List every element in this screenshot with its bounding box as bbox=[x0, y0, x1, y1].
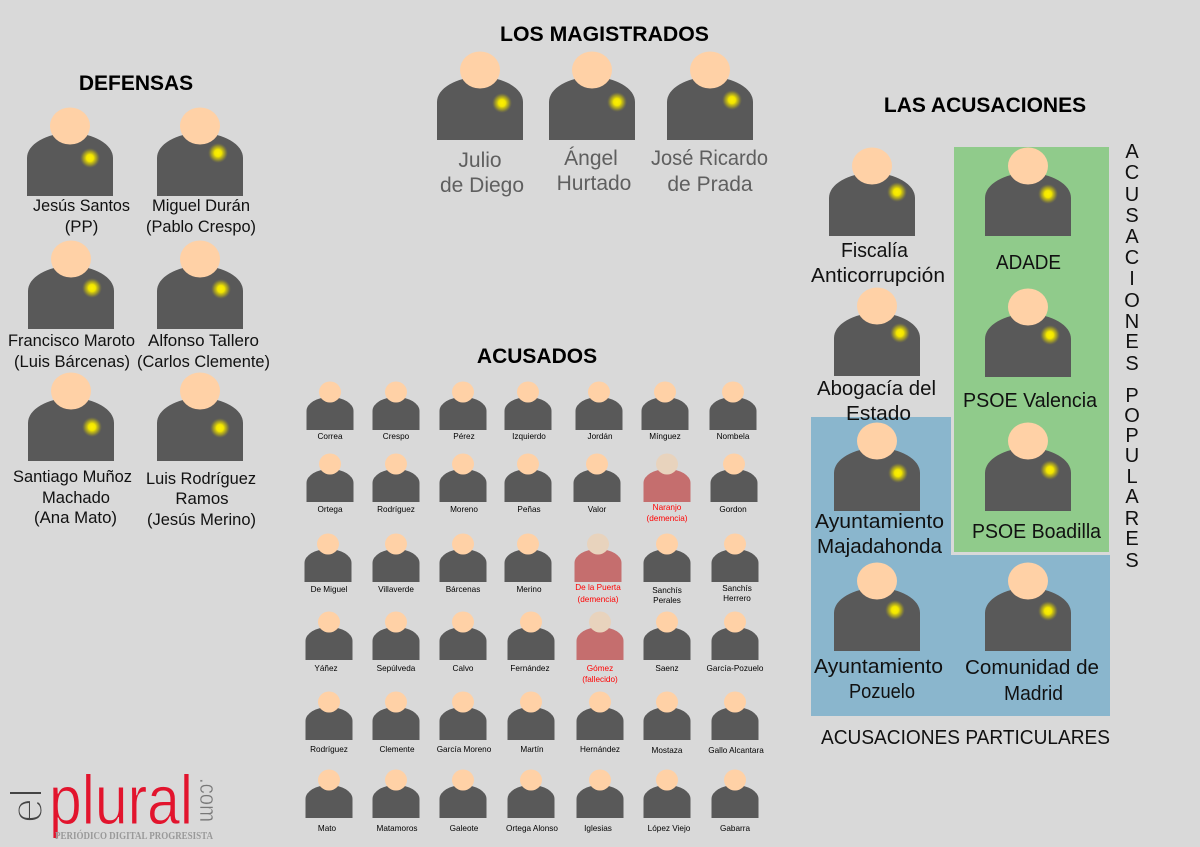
accused row 1: Crespo bbox=[383, 432, 410, 441]
accused row 4: Yáñez bbox=[314, 664, 338, 673]
prosecution: Comunidad de Madrid: Comunidad de bbox=[965, 657, 1099, 679]
defender: Francisco Maroto: Francisco Maroto bbox=[8, 331, 135, 350]
accused row 4: García-Pozuelo bbox=[707, 664, 764, 673]
prosecution: ADADE bbox=[985, 148, 1071, 274]
accused row 5: Mostaza bbox=[652, 746, 683, 755]
accused row 5: Hernández bbox=[580, 745, 620, 754]
prosecution: ADADE: ADADE bbox=[996, 252, 1061, 274]
label: acusaciones populares (vertical): A bbox=[1125, 486, 1139, 508]
defender: Jesús Santos: (PP) bbox=[65, 217, 98, 236]
accused row 6: Ortega Alonso bbox=[506, 824, 558, 833]
accused row 3: Herrero bbox=[723, 594, 751, 603]
accused row 2 bbox=[306, 454, 758, 523]
accused row 3: Merino bbox=[516, 585, 542, 594]
magistrate: José Ricardo de Prada: de Prada bbox=[667, 173, 753, 196]
label: acusaciones populares (vertical): P bbox=[1125, 385, 1139, 407]
defender: Luis Rodríguez Ramos: Luis Rodríguez bbox=[146, 469, 256, 488]
defender: Santiago Muñoz Machado: Santiago Muñoz bbox=[13, 467, 132, 486]
prosecution: Comunidad de Madrid: Madrid bbox=[1004, 683, 1063, 705]
title: defensas: DEFENSAS bbox=[79, 72, 193, 95]
magistrate: José Ricardo de Prada bbox=[651, 52, 768, 196]
label: acusaciones populares (vertical): E bbox=[1125, 528, 1139, 550]
prosecution: Abogacía del Estado: Abogacía del bbox=[817, 378, 936, 400]
accused row 2: Naranjo bbox=[653, 503, 682, 512]
accused row 1 bbox=[306, 382, 756, 441]
label: acusaciones populares (vertical): R bbox=[1125, 508, 1139, 530]
label: acusaciones populares (vertical): C bbox=[1125, 247, 1139, 269]
defender: Jesús Santos bbox=[27, 108, 130, 236]
accused row 5: Martín bbox=[520, 745, 544, 754]
defender: Alfonso Tallero: (Carlos Clemente) bbox=[137, 352, 270, 371]
prosecution: Ayuntamiento Pozuelo bbox=[814, 562, 943, 703]
title: acusados: ACUSADOS bbox=[477, 345, 597, 368]
label: acusaciones populares (vertical): O bbox=[1124, 405, 1140, 427]
accused row 2: Valor bbox=[588, 505, 607, 514]
accused row 3: Bárcenas bbox=[446, 585, 480, 594]
accused row 1: Jordán bbox=[587, 432, 613, 441]
accused row 4: Fernández bbox=[510, 664, 550, 673]
accused row 2: Rodríguez bbox=[377, 505, 415, 514]
accused row 3: Villaverde bbox=[378, 585, 414, 594]
prosecution: PSOE Boadilla bbox=[972, 422, 1102, 543]
prosecution: PSOE Valencia: PSOE Valencia bbox=[963, 390, 1098, 412]
defender: Luis Rodríguez Ramos: Ramos bbox=[175, 489, 229, 508]
prosecution: Ayuntamiento Majadahonda: Majadahonda bbox=[817, 536, 943, 558]
magistrate: Julio de Diego bbox=[437, 52, 524, 197]
magistrate: Ángel Hurtado bbox=[549, 52, 635, 195]
accused row 6: López Viejo bbox=[648, 824, 691, 833]
accused row 5: García Moreno bbox=[437, 745, 492, 754]
accused row 4: Saenz bbox=[655, 664, 679, 673]
accused row 1: Mínguez bbox=[649, 432, 681, 441]
accused row 2: (demencia) bbox=[647, 514, 688, 523]
label: acusaciones populares (vertical): S bbox=[1125, 353, 1139, 375]
label: acusaciones populares (vertical): A bbox=[1125, 226, 1139, 248]
prosecution: PSOE Boadilla: PSOE Boadilla bbox=[972, 521, 1102, 543]
label: acusaciones particulares: ACUSACIONES PARTICULARES bbox=[821, 727, 1110, 749]
prosecution: Ayuntamiento Majadahonda: Ayuntamiento bbox=[815, 511, 944, 533]
accused row 3 bbox=[304, 534, 758, 605]
magistrate: Julio de Diego: Julio bbox=[458, 149, 502, 172]
defender: Luis Rodríguez Ramos: (Jesús Merino) bbox=[147, 510, 256, 529]
defender: Jesús Santos: Jesús Santos bbox=[33, 196, 130, 215]
accused row 2: Moreno bbox=[450, 505, 478, 514]
accused row 5 bbox=[306, 692, 764, 755]
defender: Alfonso Tallero: Alfonso Tallero bbox=[148, 331, 259, 350]
accused row 3: De la Puerta bbox=[575, 583, 621, 592]
title: las acusaciones: LAS ACUSACIONES bbox=[884, 94, 1086, 117]
prosecution: Fiscalía Anticorrupción bbox=[811, 148, 945, 287]
accused row 2: Gordon bbox=[719, 505, 747, 514]
defender: Miguel Durán: (Pablo Crespo) bbox=[146, 217, 256, 236]
label: acusaciones populares (vertical): A bbox=[1125, 141, 1139, 163]
logo: elplural.com: .com bbox=[194, 778, 221, 822]
accused row 3: Sanchís bbox=[722, 584, 752, 593]
label: acusaciones populares (vertical): U bbox=[1125, 445, 1139, 467]
accused row 4: Gómez bbox=[587, 664, 613, 673]
defender: Francisco Maroto: (Luis Bárcenas) bbox=[14, 352, 130, 371]
label: acusaciones populares (vertical): P bbox=[1125, 425, 1139, 447]
label: acusaciones populares (vertical): S bbox=[1125, 205, 1139, 227]
accused row 6: Matamoros bbox=[377, 824, 417, 833]
accused row 4: Calvo bbox=[453, 664, 474, 673]
label: acusaciones populares (vertical): S bbox=[1125, 550, 1139, 572]
accused row 3: (demencia) bbox=[578, 595, 619, 604]
label: acusaciones populares (vertical): O bbox=[1124, 290, 1140, 312]
label: acusaciones populares (vertical): U bbox=[1125, 184, 1139, 206]
logo: elplural.com: plural bbox=[49, 761, 193, 839]
label: acusaciones populares (vertical): L bbox=[1126, 466, 1138, 488]
defender: Santiago Muñoz Machado: Machado bbox=[42, 488, 110, 507]
magistrate: José Ricardo de Prada: José Ricardo bbox=[651, 147, 768, 170]
title: los magistrados: LOS MAGISTRADOS bbox=[500, 23, 709, 46]
prosecution: Fiscalía Anticorrupción: Anticorrupción bbox=[811, 265, 945, 287]
prosecution: Ayuntamiento Pozuelo: Ayuntamiento bbox=[814, 656, 943, 678]
prosecution: Abogacía del Estado bbox=[817, 288, 936, 425]
accused row 2: Ortega bbox=[317, 505, 343, 514]
accused row 6: Mato bbox=[318, 824, 337, 833]
accused row 6 bbox=[306, 770, 758, 833]
accused row 4: (fallecido) bbox=[582, 675, 618, 684]
defender: Alfonso Tallero bbox=[137, 240, 270, 371]
accused row 5: Rodríguez bbox=[310, 745, 348, 754]
panel: acusaciones populares bbox=[954, 147, 1109, 552]
defender: Miguel Durán: Miguel Durán bbox=[152, 196, 250, 215]
accused row 1: Correa bbox=[317, 432, 343, 441]
defender: Santiago Muñoz Machado bbox=[13, 372, 132, 527]
label: acusaciones populares (vertical) bbox=[1124, 141, 1140, 572]
prosecution: Fiscalía Anticorrupción: Fiscalía bbox=[841, 240, 909, 262]
defender: Santiago Muñoz Machado: (Ana Mato) bbox=[34, 508, 117, 527]
accused row 1: Nombela bbox=[717, 432, 750, 441]
defender: Miguel Durán bbox=[146, 108, 256, 236]
defender: Luis Rodríguez Ramos bbox=[146, 372, 256, 529]
accused row 4 bbox=[306, 612, 764, 684]
accused row 6: Iglesias bbox=[584, 824, 612, 833]
logo: elplural.com: el bbox=[1, 788, 52, 823]
label: acusaciones populares (vertical): C bbox=[1125, 162, 1139, 184]
magistrate: Ángel Hurtado: Hurtado bbox=[557, 172, 631, 195]
prosecution: Ayuntamiento Majadahonda bbox=[815, 422, 944, 558]
prosecution: Ayuntamiento Pozuelo: Pozuelo bbox=[849, 681, 915, 703]
panel: acusaciones particulares bbox=[811, 417, 1110, 716]
accused row 6: Galeote bbox=[450, 824, 479, 833]
accused row 5: Gallo Alcantara bbox=[708, 746, 764, 755]
prosecution: Comunidad de Madrid bbox=[965, 562, 1099, 705]
accused row 6: Gabarra bbox=[720, 824, 750, 833]
accused row 3: Perales bbox=[653, 596, 681, 605]
accused row 5: Clemente bbox=[379, 745, 415, 754]
label: acusaciones populares (vertical): I bbox=[1129, 268, 1135, 290]
prosecution: PSOE Valencia bbox=[963, 288, 1098, 412]
accused row 4: Sepúlveda bbox=[377, 664, 416, 673]
logo: elplural.com: PERIÓDICO DIGITAL PROGRESISTA bbox=[55, 830, 213, 842]
label: acusaciones populares (vertical): N bbox=[1125, 311, 1139, 333]
prosecution: Abogacía del Estado: Estado bbox=[846, 403, 911, 425]
accused row 1: Izquierdo bbox=[512, 432, 546, 441]
accused row 3: Sanchís bbox=[652, 586, 682, 595]
accused row 2: Peñas bbox=[517, 505, 541, 514]
accused row 3: De Miguel bbox=[311, 585, 348, 594]
accused row 1: Pérez bbox=[453, 432, 475, 441]
magistrate: Ángel Hurtado: Ángel bbox=[564, 147, 618, 170]
label: acusaciones populares (vertical): E bbox=[1125, 331, 1139, 353]
magistrate: Julio de Diego: de Diego bbox=[440, 174, 524, 197]
defender: Francisco Maroto bbox=[8, 240, 135, 371]
